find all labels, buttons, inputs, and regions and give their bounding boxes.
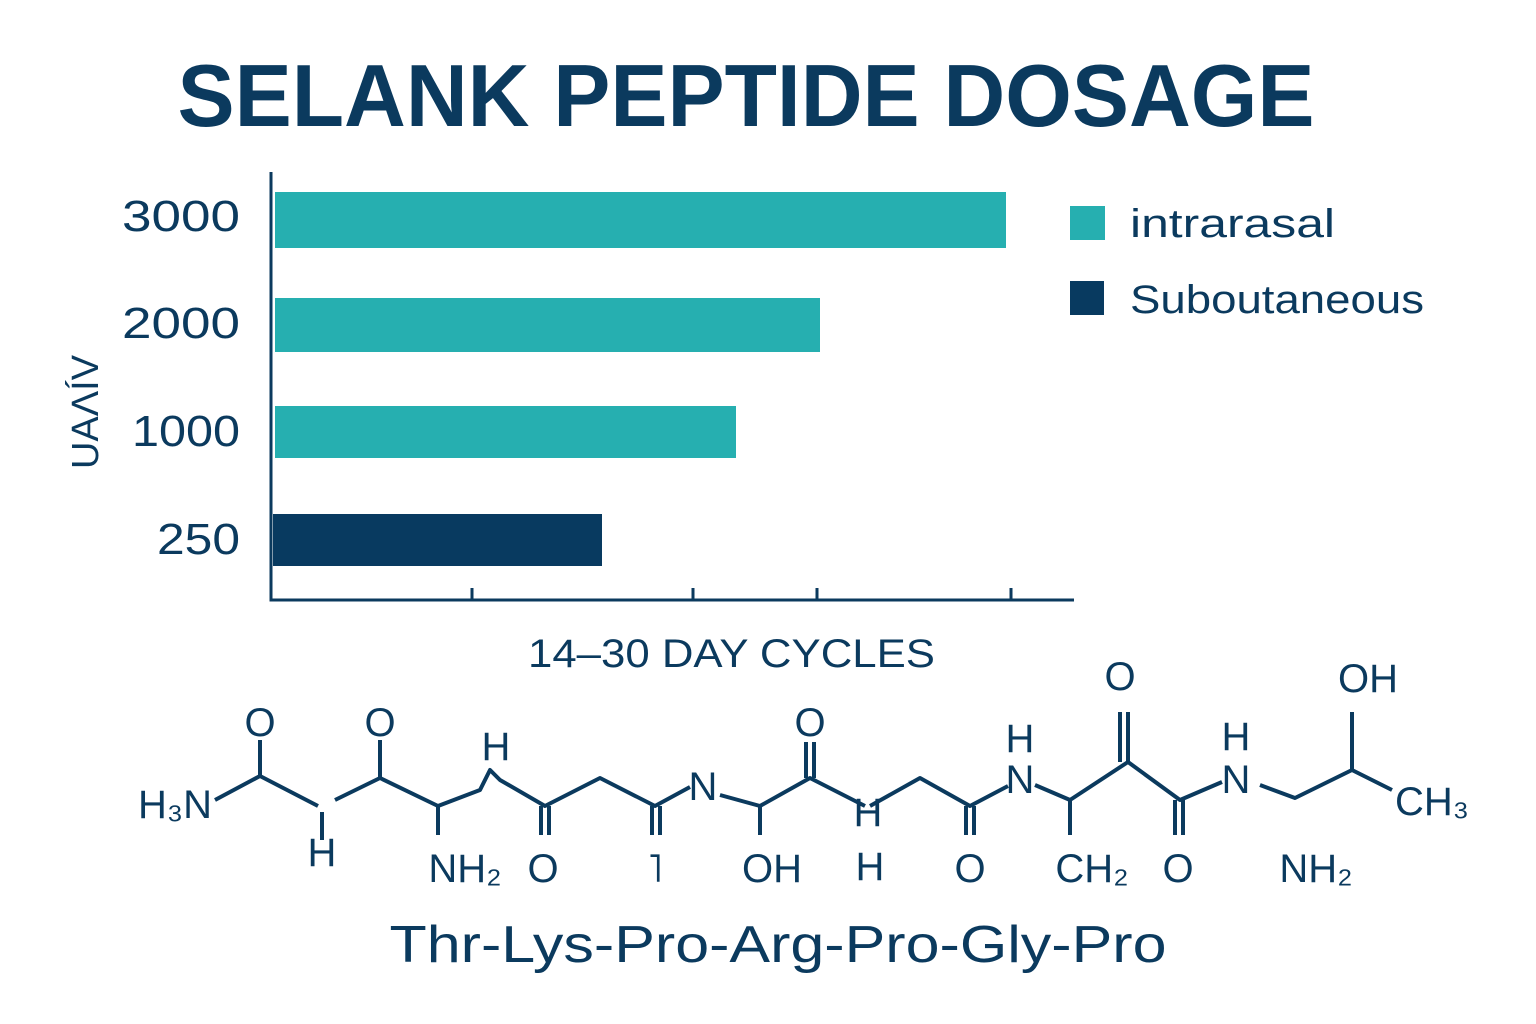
atom labels: H	[854, 791, 882, 835]
atom labels: H	[856, 845, 884, 889]
atom labels: ˥	[647, 847, 663, 891]
legend	[1070, 202, 1424, 322]
atom labels: O	[794, 701, 826, 745]
atom labels: O	[954, 847, 986, 891]
atom labels: H	[1006, 717, 1034, 761]
bar: 2000	[275, 298, 820, 352]
y tick labels: 1000	[132, 407, 240, 456]
atom labels: H	[1222, 715, 1250, 759]
atom labels: N	[1222, 758, 1250, 802]
bar: 3000	[275, 192, 1006, 248]
molecule structure	[138, 655, 1469, 891]
atom labels: O	[244, 701, 276, 745]
bar: 1000	[275, 406, 736, 458]
atom labels: H	[308, 831, 336, 875]
atom labels: O	[1104, 655, 1136, 699]
legend: Suboutaneous	[1130, 278, 1424, 322]
atom labels: O	[364, 701, 396, 745]
atom labels: H	[482, 725, 510, 769]
sequence label: Thr-Lys-Pro-Arg-Pro-Gly-Pro	[390, 916, 1166, 974]
atom labels: CH₂	[1055, 847, 1129, 891]
atom labels: NH₂	[428, 847, 502, 891]
atom labels: H₃N	[138, 783, 212, 827]
y axis label: UAΛÍV	[64, 354, 107, 469]
bar chart	[64, 172, 1074, 676]
axes	[271, 172, 1074, 600]
title: SELANK PEPTIDE DOSAGE	[178, 46, 1314, 145]
atom labels: O	[527, 847, 559, 891]
y tick labels: 3000	[122, 192, 240, 241]
atom labels: CH₃	[1395, 780, 1469, 824]
atom labels: O	[1162, 847, 1194, 891]
atom labels: N	[689, 765, 717, 809]
x axis label: 14–30 DAY CYCLES	[528, 632, 935, 676]
atom labels: OH	[1338, 657, 1398, 701]
y tick labels: 2000	[122, 299, 240, 348]
atom labels	[138, 655, 1469, 891]
atom labels: NH₂	[1279, 847, 1353, 891]
legend: intrarasal	[1130, 202, 1335, 246]
y tick labels	[122, 192, 240, 564]
atom labels: N	[1006, 758, 1034, 802]
y tick labels: 250	[157, 515, 240, 564]
atom labels: OH	[742, 847, 802, 891]
bar: 250	[273, 514, 602, 566]
